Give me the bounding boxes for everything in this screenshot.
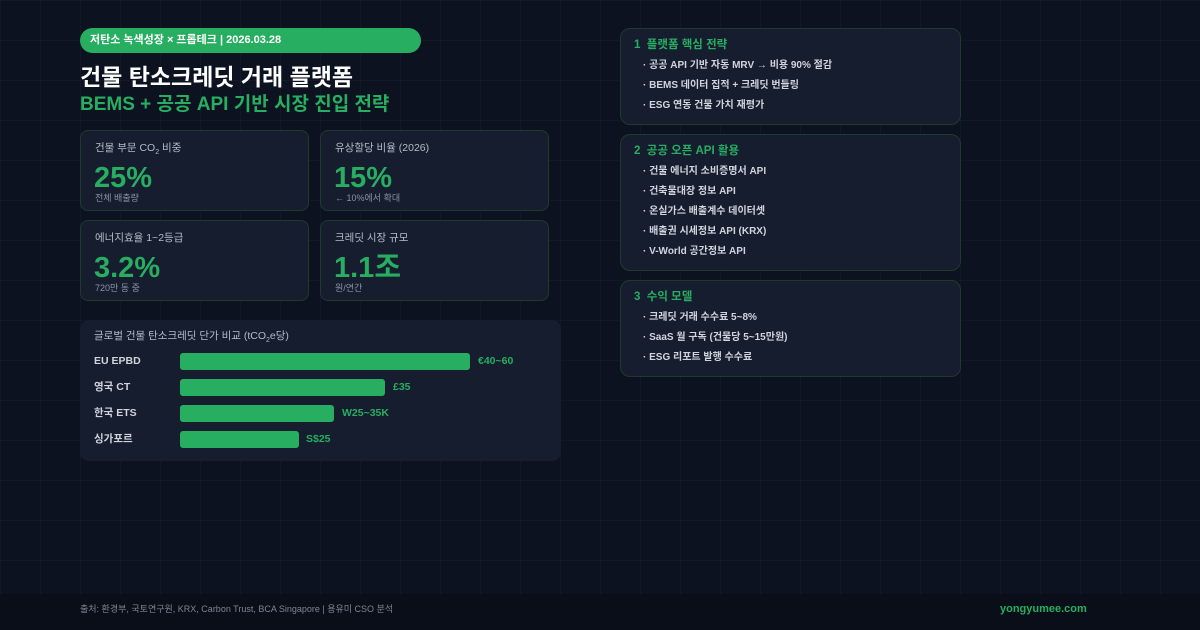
panel: revenue model bbox=[620, 280, 961, 377]
panel: strategy: · 공공 API 기반 자동 MRV → 비용 90% 절감 bbox=[643, 60, 832, 71]
bar: Singapore bbox=[94, 431, 331, 448]
panel: public API: · 건축물대장 정보 API bbox=[643, 186, 736, 197]
bar: Singapore: 싱가포르 bbox=[94, 433, 133, 445]
source text: 출처: 환경부, 국토연구원, KRX, Carbon Trust, BCA Singapore | 용유미 CSO 분석 bbox=[80, 604, 393, 614]
panel: revenue model: 3 수익 모델 bbox=[634, 291, 692, 303]
bar: EU: EU EPBD bbox=[94, 355, 141, 367]
bar chart: 글로벌 건물 탄소크레딧 단가 비교 (tCO2e당) bbox=[94, 330, 289, 344]
panel: strategy bbox=[620, 28, 961, 125]
bar: Korea: 한국 ETS bbox=[94, 407, 137, 419]
site url: yongyumee.com bbox=[1000, 603, 1087, 615]
card: market size: 1.1조 bbox=[334, 252, 401, 284]
panel: public API: · 배출권 시세정보 API (KRX) bbox=[643, 226, 766, 237]
badge: 저탄소 녹색성장 × 프롭테크 | 2026.03.28 bbox=[90, 34, 281, 46]
panel: public API: · 건물 에너지 소비증명서 API bbox=[643, 166, 766, 177]
card: CO2 share: 건물 부문 CO2 비중 bbox=[95, 142, 181, 156]
bar: Korea: W25~35K bbox=[342, 407, 389, 419]
card: market size: 원/연간 bbox=[335, 283, 362, 293]
card: energy efficiency: 3.2% bbox=[94, 252, 160, 284]
bar: EU: €40~60 bbox=[478, 355, 513, 367]
card: energy efficiency bbox=[80, 220, 309, 301]
bar: UK: 영국 CT bbox=[94, 381, 130, 393]
footer bbox=[0, 594, 1200, 630]
panel: public API bbox=[620, 134, 961, 271]
card: market size: 크레딧 시장 규모 bbox=[335, 232, 408, 244]
bar: Korea bbox=[94, 405, 389, 422]
panel: strategy: · ESG 연동 건물 가치 재평가 bbox=[643, 100, 764, 111]
panel: public API: · V-World 공간정보 API bbox=[643, 246, 746, 257]
subtitle: BEMS + 공공 API 기반 시장 진입 전략 bbox=[80, 94, 389, 115]
card: paid allocation: 15% bbox=[334, 162, 392, 194]
badge bbox=[80, 28, 421, 53]
panel: revenue model: · 크레딧 거래 수수료 5~8% bbox=[643, 312, 757, 323]
panel: public API: · 온실가스 배출계수 데이터셋 bbox=[643, 206, 765, 217]
card: CO2 share bbox=[80, 130, 309, 211]
bar: EU bbox=[94, 353, 513, 370]
card: energy efficiency: 720만 동 중 bbox=[95, 283, 140, 293]
panel: strategy: · BEMS 데이터 집적 + 크레딧 번들링 bbox=[643, 80, 799, 91]
card: CO2 share: 전체 배출량 bbox=[95, 193, 139, 203]
bar: UK bbox=[94, 379, 411, 396]
panel: strategy: 1 플랫폼 핵심 전략 bbox=[634, 39, 727, 51]
card: paid allocation: ← 10%에서 확대 bbox=[335, 193, 400, 203]
panel: revenue model: · SaaS 월 구독 (건물당 5~15만원) bbox=[643, 332, 787, 343]
card: CO2 share: 25% bbox=[94, 162, 152, 194]
panel: public API: 2 공공 오픈 API 활용 bbox=[634, 145, 739, 157]
bar chart bbox=[80, 320, 561, 461]
bar: UK: £35 bbox=[393, 381, 411, 393]
card: paid allocation: 유상할당 비율 (2026) bbox=[335, 142, 429, 154]
card: paid allocation bbox=[320, 130, 549, 211]
panel: revenue model: · ESG 리포트 발행 수수료 bbox=[643, 352, 752, 363]
title: 건물 탄소크레딧 거래 플랫폼 bbox=[80, 64, 353, 90]
bar: Singapore: S$25 bbox=[306, 433, 331, 445]
card: market size bbox=[320, 220, 549, 301]
card: energy efficiency: 에너지효율 1~2등급 bbox=[95, 232, 183, 244]
